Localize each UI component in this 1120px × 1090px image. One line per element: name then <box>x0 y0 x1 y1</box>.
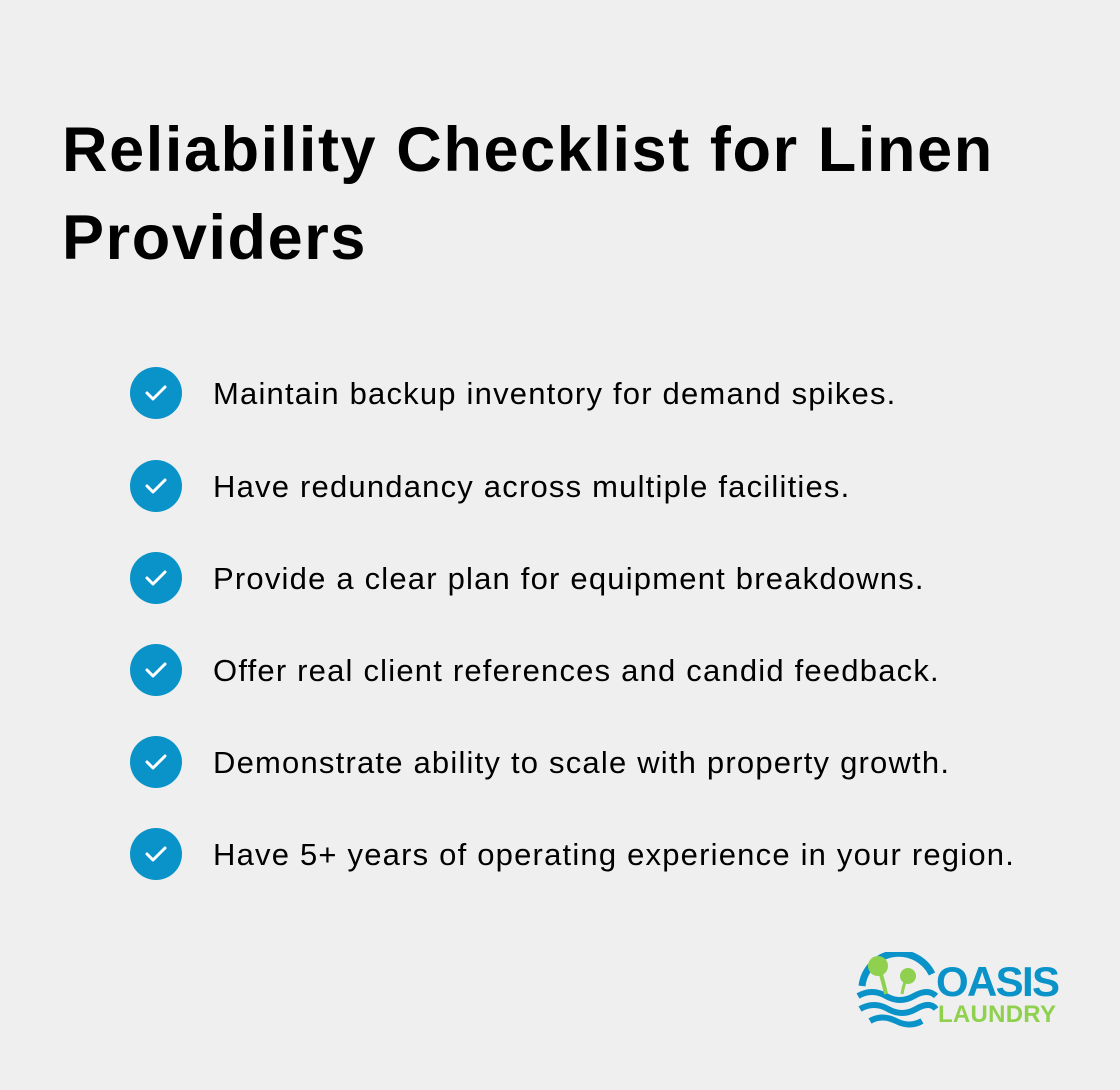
logo text: OASIS <box>936 958 1060 1005</box>
item 3: Provide a clear plan for equipment breakdowns. <box>213 561 925 596</box>
item 3 <box>130 552 925 604</box>
item 2 <box>130 460 850 512</box>
item 1: Maintain backup inventory for demand spikes. <box>213 376 896 411</box>
item 6 <box>130 828 1015 880</box>
item 5: Demonstrate ability to scale with property growth. <box>213 745 950 780</box>
item 5 <box>130 736 950 788</box>
logo text: LAUNDRY <box>938 1001 1056 1028</box>
item 4 <box>130 644 940 696</box>
item 4: Offer real client references and candid feedback. <box>213 653 940 688</box>
title: Reliability Checklist for Linen Providers <box>62 115 994 273</box>
logo <box>856 952 1060 1028</box>
item 2: Have redundancy across multiple facilities. <box>213 469 850 504</box>
logo text <box>936 958 1060 1028</box>
icon: logo mark <box>858 953 936 1024</box>
item 6: Have 5+ years of operating experience in your region. <box>213 837 1015 872</box>
item 1 <box>130 367 896 419</box>
